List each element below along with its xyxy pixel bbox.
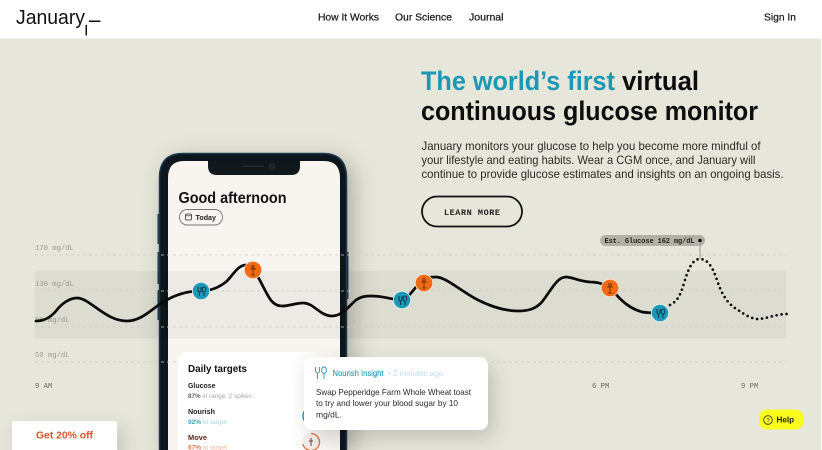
icon: meal marker 1 (192, 282, 210, 300)
hero paragraph: continue to provide glucose estimates and insights on an ongoing basis. (422, 167, 784, 181)
today pill (180, 210, 222, 225)
today pill: Today (196, 213, 217, 222)
logo: January (16, 6, 86, 29)
discount tab (12, 421, 117, 450)
axis labels: 50 mg/dL (35, 352, 70, 360)
logo (16, 6, 100, 36)
learn more button: LEARN MORE (444, 208, 500, 218)
axis labels: 9 AM (35, 383, 52, 391)
axis labels: 90 mg/dL (35, 317, 70, 325)
icon: cutlery (316, 367, 326, 379)
move target (188, 435, 227, 450)
phone (158, 153, 348, 450)
callout: nourish insight: • 2 minutes ago (388, 369, 444, 378)
insight body: to try and lower your blood sugar by 10 (316, 398, 458, 408)
move target: Move (188, 433, 207, 442)
axis labels (35, 245, 758, 391)
glucose chart (35, 235, 787, 391)
nav links: Our Science (395, 12, 452, 24)
help button (759, 410, 804, 430)
glucose target (188, 382, 252, 400)
icon: movement marker 1 (244, 261, 262, 279)
help button: ? (766, 418, 770, 424)
icon: movement marker 3 (601, 279, 619, 297)
axis labels: 170 mg/dL (35, 245, 74, 253)
hero paragraph: January monitors your glucose to help you become more mindful of (422, 139, 761, 153)
insight body: Swap Pepperidge Farm Whole Wheat toast (316, 387, 472, 397)
glucose target: 87% in range, 2 spikes (188, 393, 252, 400)
glucose target: Glucose (188, 381, 216, 390)
nav links (318, 12, 796, 24)
phone screen (168, 161, 340, 450)
hero heading: continuous glucose monitor (421, 96, 758, 126)
hero heading: The world’s first (421, 66, 615, 96)
hero heading (421, 66, 758, 126)
insight body (316, 387, 472, 420)
nourish target (188, 408, 227, 426)
discount tab: Get 20% off (36, 430, 94, 442)
axis labels: 6 PM (592, 383, 609, 391)
nav links: How It Works (318, 12, 379, 24)
nav links: Journal (469, 12, 504, 24)
glucose line (36, 265, 660, 321)
grid lines (35, 255, 786, 362)
phone notch (208, 161, 300, 175)
insight header: Nourish Insight (332, 369, 384, 378)
heading: Daily targets (188, 363, 247, 375)
axis labels: 130 mg/dL (35, 281, 74, 289)
nourish target: 92% to target (188, 419, 227, 426)
target range band (35, 271, 786, 338)
navigation bar (0, 0, 822, 38)
hero paragraph: your lifestyle and eating habits. Wear a CGM once, and January will (422, 153, 756, 167)
estimated glucose dotted line (670, 259, 787, 319)
axis labels: 9 PM (741, 383, 758, 391)
icon: movement marker 2 (415, 274, 433, 292)
estimated glucose tooltip (600, 235, 705, 259)
panel: daily targets (178, 352, 320, 450)
move ring (302, 433, 320, 450)
callout: nourish insight (304, 357, 488, 430)
nav links: Sign In (764, 12, 796, 24)
hero paragraph (422, 139, 784, 181)
greeting: Good afternoon (178, 190, 286, 207)
help button: Help (776, 414, 794, 424)
icon: meal marker 3 (651, 304, 669, 322)
insight body: mg/dL. (316, 410, 342, 420)
estimated glucose tooltip: Est. Glucose 162 mg/dL (604, 238, 694, 246)
nourish target: Nourish (188, 407, 215, 416)
learn more button (422, 196, 522, 226)
hero heading: virtual (622, 66, 699, 96)
nourish ring (302, 410, 304, 422)
icon: meal marker 2 (393, 291, 411, 309)
